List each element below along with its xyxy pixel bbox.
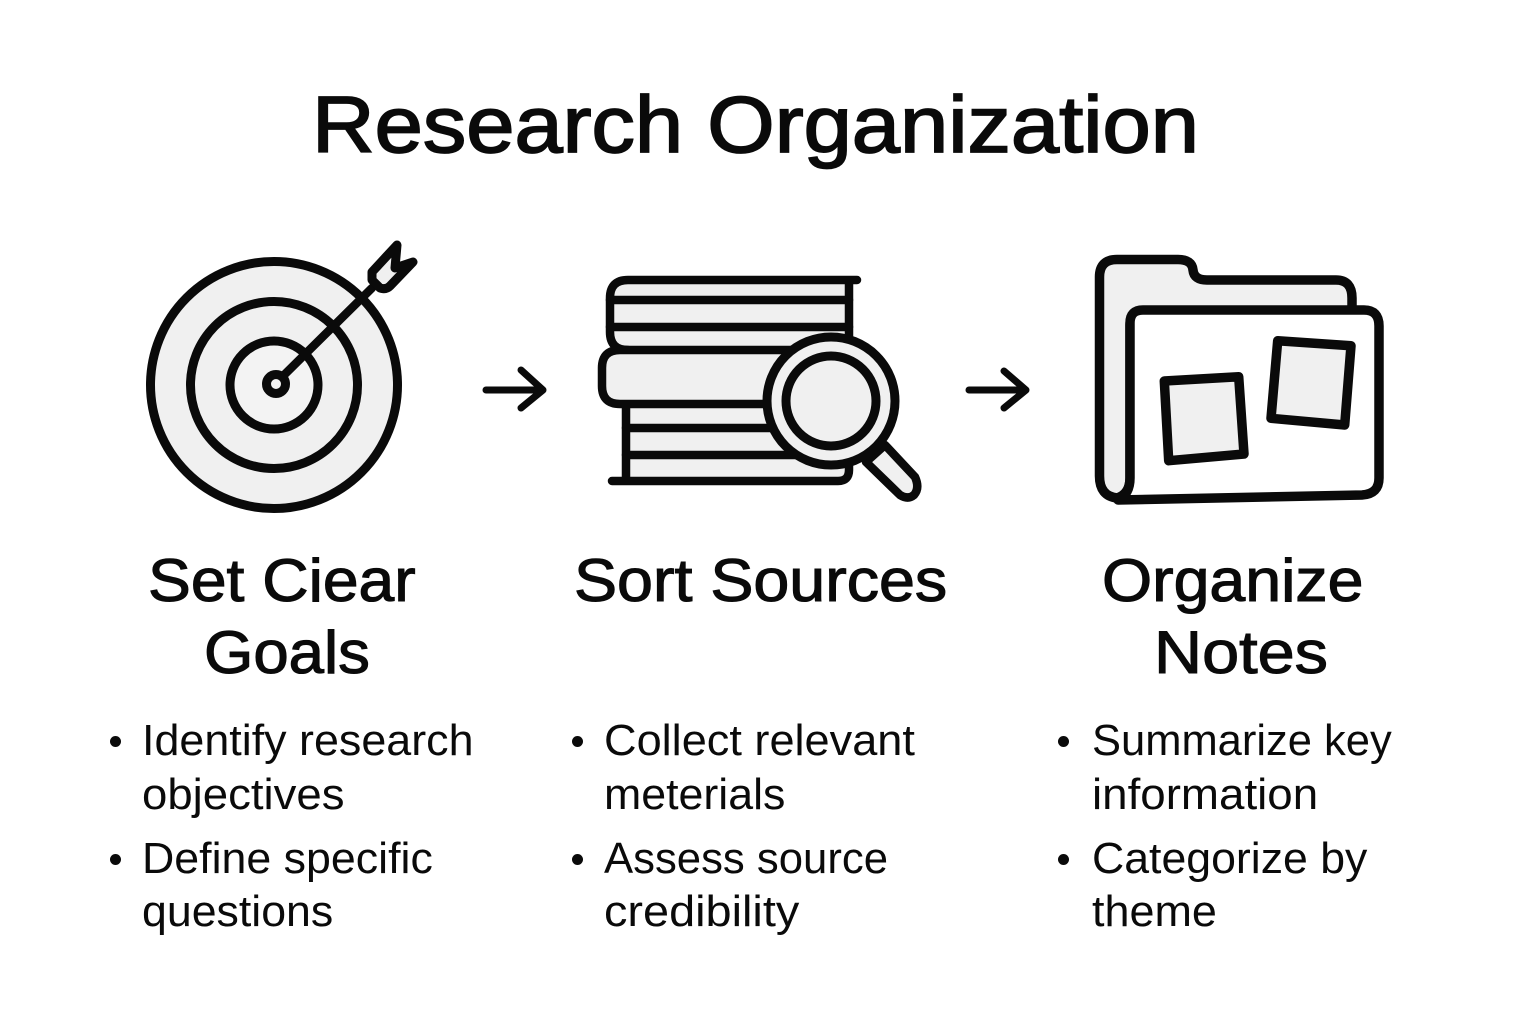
heading: organize notes [1102, 547, 1363, 686]
heading: organize notes: Notes [1154, 619, 1328, 686]
icon: folder with notes [1100, 260, 1379, 500]
heading: sort sources: Sort Sources [574, 547, 947, 614]
bullets: sources [572, 717, 915, 936]
icon: books with magnifier [602, 280, 917, 498]
icon: target with arrow [150, 245, 413, 508]
bullets: notes: information [1092, 771, 1318, 819]
bullets: notes: Categorize by [1092, 835, 1367, 883]
bullets: notes: Summarize key [1092, 717, 1392, 765]
bullets: goals [110, 717, 474, 936]
heading: set clear goals: Goals [204, 619, 370, 686]
bullets: goals: questions [142, 888, 333, 936]
bullets: goals: Identify research [142, 717, 474, 765]
title: Research Organization [312, 80, 1199, 169]
arrow: sources to notes [969, 371, 1026, 408]
bullets: goals: objectives [142, 771, 345, 819]
bullets: notes: theme [1092, 888, 1217, 936]
bullets: sources: meterials [604, 771, 785, 819]
heading: set clear goals [148, 547, 416, 686]
bullets: sources: Collect relevant [604, 717, 915, 765]
heading: set clear goals: Set Ciear [148, 547, 416, 614]
bullets: sources: credibility [604, 888, 799, 936]
bullets: goals: Define specific [142, 835, 433, 883]
arrow: goals to sources [486, 370, 543, 408]
bullets: sources: Assess source [604, 835, 888, 883]
heading: organize notes: Organize [1102, 547, 1363, 614]
bullets: notes [1058, 717, 1392, 936]
